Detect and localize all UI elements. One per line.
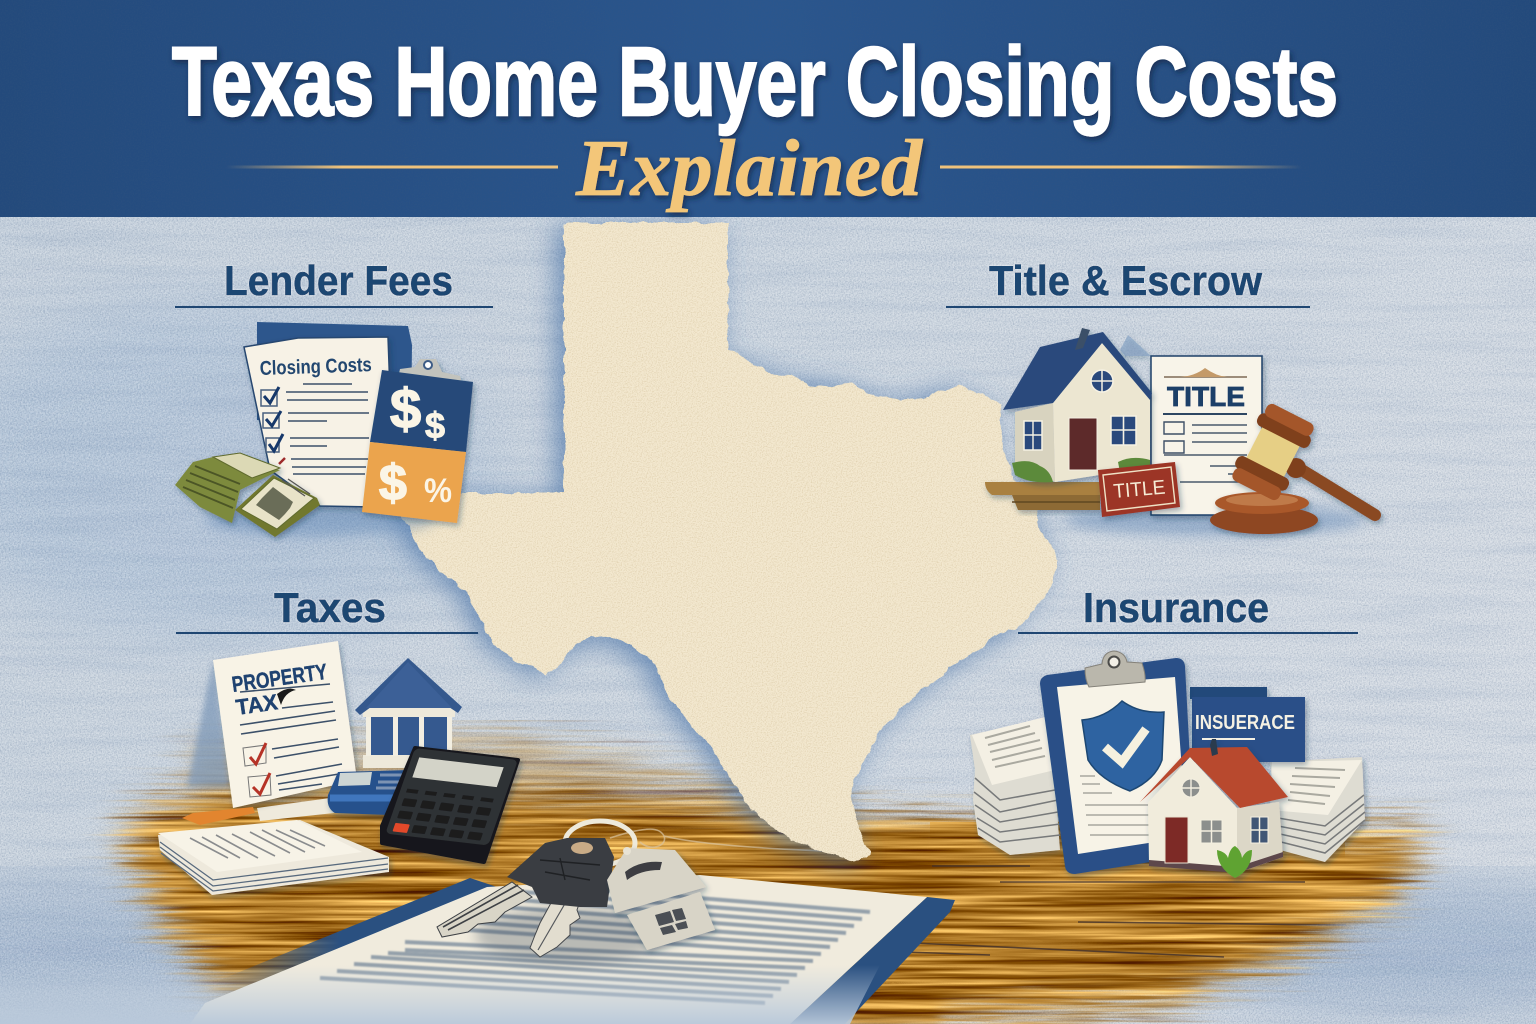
icon: red title stamp: TITLE (1113, 477, 1166, 503)
icon: red title stamp (1098, 462, 1180, 517)
icon: clipboard with shield (1040, 651, 1195, 874)
icon group: title and escrow (985, 328, 1375, 536)
heading: Title & Escrow: Title & Escrow (989, 257, 1262, 304)
document folder (195, 878, 500, 1012)
icon: price tag with dollar signs: $ (390, 377, 421, 440)
icon: house keys on ring (437, 821, 715, 963)
Texas map silhouette (400, 223, 1058, 862)
house-shaped key tag (607, 847, 715, 950)
icon: insurance sign: INSUERACE (1195, 712, 1295, 734)
icon: blue folder (257, 322, 412, 420)
icon: orange pencil (182, 807, 255, 825)
header banner (0, 0, 1536, 217)
heading: Taxes: Taxes (274, 584, 386, 631)
icon: closing costs checklist (244, 337, 391, 507)
icon: green open books (175, 453, 320, 537)
black key head (507, 838, 614, 907)
closing document on table (190, 875, 955, 1024)
icon: title document: TITLE (1167, 381, 1245, 412)
icon: property tax form (187, 641, 357, 821)
icon: blue roof house (1003, 328, 1152, 482)
icon group: lender fees (175, 322, 473, 537)
icon: wooden base for house (985, 482, 1100, 510)
icon: price tag with dollar signs: $ (379, 455, 407, 511)
icon: price tag with dollar signs: % (424, 472, 452, 510)
icon: bank building (355, 658, 462, 768)
icon: paper stack (158, 820, 389, 895)
icon: title document (1120, 335, 1262, 515)
background: textured blue paper (0, 217, 1536, 1024)
wood table surface (87, 720, 1454, 1024)
icon: left paper stack (970, 717, 1060, 855)
right key blade (530, 892, 582, 957)
icon: price tag with dollar signs (362, 359, 473, 523)
wood knot grain line (610, 828, 822, 852)
icon: closing costs checklist: Closing Costs (259, 354, 372, 380)
icon: insurance sign (1190, 687, 1305, 762)
heading: Lender Fees: Lender Fees (224, 257, 453, 304)
left key blade (437, 882, 532, 937)
subtitle: Explained: Explained (575, 125, 923, 213)
document text lines (320, 885, 870, 1003)
icon: right paper stack (1270, 757, 1365, 862)
icon: red roof house (1140, 739, 1288, 878)
Texas map shadow (392, 227, 1050, 866)
icon group: property taxes (158, 641, 518, 895)
icon: gavel (1210, 401, 1375, 534)
icon: black calculator (382, 748, 518, 862)
icon: property tax form: TAX (234, 689, 280, 720)
heading: Insurance: Insurance (1083, 584, 1269, 631)
icon: blue payment terminal (328, 770, 410, 815)
key ring (565, 821, 635, 865)
icon: property tax form: PROPERTY (230, 659, 329, 697)
bottom mist fade (0, 965, 880, 1024)
icon: blue shield with check (1082, 701, 1164, 791)
document sheet (190, 875, 927, 1024)
icon group: insurance (970, 651, 1365, 878)
icon: price tag with dollar signs: $ (425, 405, 445, 446)
subtitle: Explained (226, 125, 1302, 213)
